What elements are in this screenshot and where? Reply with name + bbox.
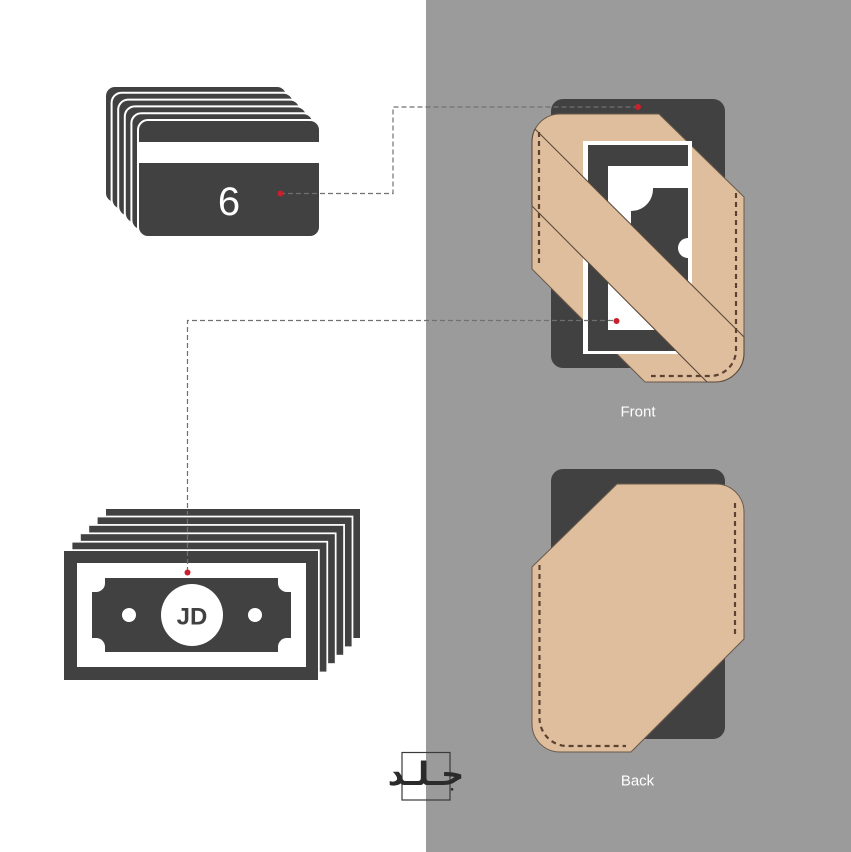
grey background panel [426, 0, 851, 852]
icon: stack of banknotes: JD [177, 604, 207, 630]
wallet back view [532, 469, 744, 752]
icon: stack of cards: 6 [218, 180, 240, 224]
logo: جـلـد [388, 755, 464, 793]
connector: card to wallet [278, 104, 641, 196]
connector: banknote to wallet [184, 318, 620, 576]
leather body front [532, 114, 744, 382]
phone card behind back [551, 469, 725, 739]
icon: stack of cards [106, 87, 319, 236]
diagonal leather band [532, 129, 744, 382]
stitching back [540, 503, 735, 746]
banknote inside pocket [583, 141, 692, 354]
stitching front [539, 132, 736, 376]
leather body back [532, 484, 744, 752]
wallet front view [532, 99, 744, 382]
icon: stack of banknotes [64, 509, 360, 680]
label: Front: Front [620, 404, 656, 420]
band edges [532, 129, 744, 382]
phone card behind front [551, 99, 725, 368]
label: Back: Back [621, 772, 655, 790]
